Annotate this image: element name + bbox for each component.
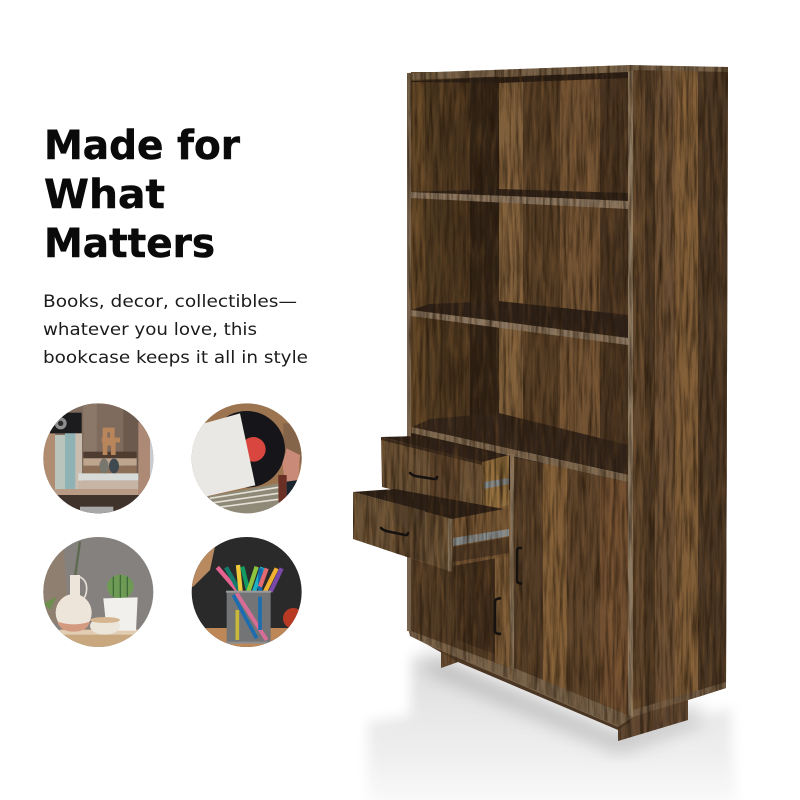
shelf 3: [412, 413, 628, 482]
door handles: [495, 548, 522, 634]
centre divider: [510, 453, 514, 669]
photo circle: pencils in mesh cup: [190, 533, 304, 650]
title: What: [44, 172, 165, 218]
top inner shadow: [411, 72, 628, 83]
photo circle: books on a shelf: [43, 403, 154, 514]
upper drawer: [381, 436, 509, 512]
lower drawer: [353, 489, 509, 572]
photo circle: vinyl record and sleeve: [190, 400, 303, 518]
left door: [411, 490, 510, 668]
base trim and plinth: [407, 625, 688, 741]
top surface: [407, 65, 728, 80]
title: Matters: [44, 221, 215, 267]
photo circle: vase and cactus: [43, 537, 154, 647]
wood grain texture: [350, 60, 730, 750]
floor shadow: [368, 650, 736, 800]
right door: [514, 457, 628, 715]
description text: bookcase keeps it all in style: [43, 348, 308, 368]
right side panel: [633, 67, 728, 717]
shelf 1: [410, 189, 628, 209]
title: Made for: [44, 123, 240, 169]
back panel planks: [411, 72, 628, 452]
description text: Books, decor, collectibles—: [43, 292, 297, 312]
drawer handles: [381, 473, 437, 535]
shelf 2: [411, 301, 628, 345]
front vertical edges: [407, 66, 633, 717]
title: [44, 123, 240, 267]
description text: [43, 292, 308, 368]
description text: whatever you love, this: [43, 320, 257, 340]
cabinet interior behind drawers: [411, 433, 628, 560]
bookcase: [350, 60, 730, 750]
